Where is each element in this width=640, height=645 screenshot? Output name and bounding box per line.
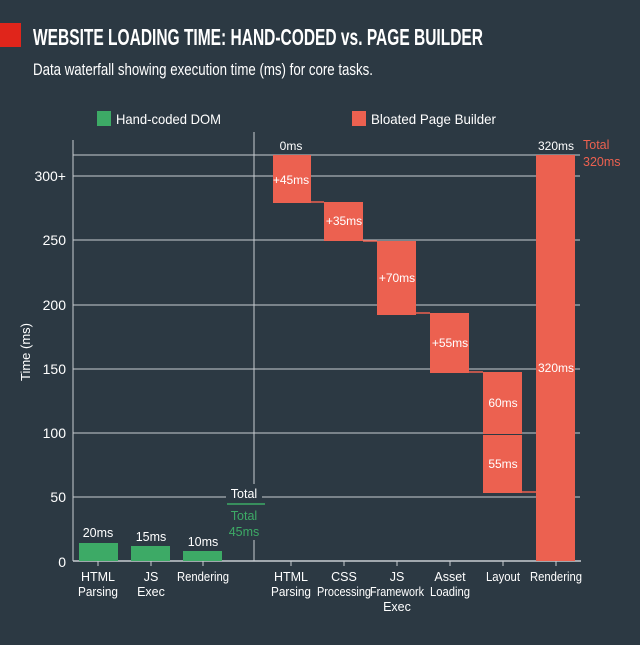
green labels: 15ms — [136, 530, 166, 544]
legend — [97, 111, 496, 127]
red labels — [273, 139, 574, 471]
x labels: HTML — [274, 570, 308, 584]
subtitle: Data waterfall showing execution time (ms) for core tasks. — [33, 60, 373, 79]
title accent — [0, 23, 21, 47]
red labels: 55ms — [488, 457, 518, 471]
green labels: 20ms — [83, 526, 113, 540]
y axis labels: 50 — [50, 489, 66, 505]
legend: Hand-coded DOM — [116, 111, 221, 127]
green labels — [83, 487, 257, 549]
connectors — [311, 202, 536, 492]
y axis labels: 300+ — [34, 168, 66, 184]
red total — [583, 138, 621, 169]
y axis labels: 150 — [43, 361, 66, 377]
legend: Bloated Page Builder — [371, 111, 496, 127]
red labels: +55ms — [432, 336, 468, 350]
x labels: Exec — [137, 585, 165, 599]
grid — [73, 132, 581, 561]
x labels: Layout — [486, 570, 520, 584]
x labels: Loading — [430, 585, 470, 599]
y axis labels: 250 — [43, 232, 66, 248]
red total: 320ms — [583, 155, 621, 169]
x labels: Processing — [317, 585, 371, 599]
y axis labels: 0 — [58, 554, 66, 570]
green total: Total — [231, 509, 257, 523]
x ticks — [98, 561, 556, 566]
y axis labels — [34, 168, 66, 570]
red bars — [273, 155, 575, 561]
green labels: Total — [231, 487, 257, 501]
x labels: Asset — [434, 570, 466, 584]
x labels: Exec — [383, 600, 411, 614]
x labels: HTML — [81, 570, 115, 584]
x labels: CSS — [331, 570, 357, 584]
x labels: Rendering — [530, 570, 582, 584]
red total: Total — [583, 138, 609, 152]
x labels: Rendering — [177, 570, 229, 584]
green labels: 10ms — [188, 535, 218, 549]
red labels: 0ms — [280, 139, 302, 153]
red labels: +45ms — [273, 173, 309, 187]
x labels: JS — [390, 570, 404, 584]
red labels: +70ms — [379, 271, 415, 285]
x labels: Parsing — [78, 585, 118, 599]
y axis title: Time (ms) — [18, 323, 33, 381]
x labels: Parsing — [271, 585, 311, 599]
green bars — [79, 543, 222, 561]
x labels: Framework — [370, 585, 425, 599]
red labels: 320ms — [538, 361, 574, 375]
red labels: 60ms — [488, 396, 518, 410]
x labels: JS — [144, 570, 158, 584]
y axis labels: 100 — [43, 425, 66, 441]
x labels — [78, 570, 582, 614]
y axis labels: 200 — [43, 297, 66, 313]
green total — [227, 504, 265, 539]
red labels: 320ms — [538, 139, 574, 153]
green total: 45ms — [229, 525, 259, 539]
red labels: +35ms — [326, 214, 362, 228]
